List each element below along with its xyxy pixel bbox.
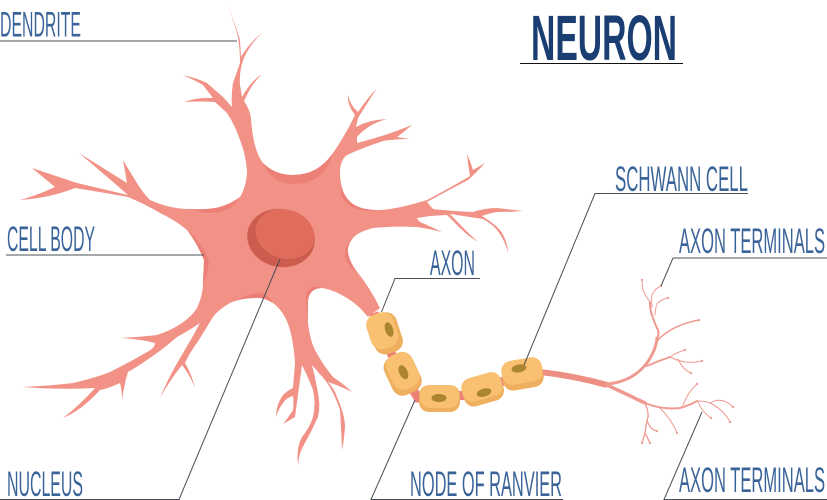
neuron cell body with dendrites	[20, 2, 523, 465]
Schwann cell 5	[500, 356, 545, 392]
icon: nucleus	[242, 201, 321, 273]
label: axon terminals upper	[661, 222, 827, 286]
dendrites and soma silhouette	[20, 2, 523, 465]
label: cell body: CELL BODY	[7, 220, 95, 259]
label: Schwann cell	[524, 160, 748, 365]
label: nucleus	[0, 259, 280, 500]
axon segments and nodes	[374, 313, 525, 398]
Schwann cell 2	[380, 348, 425, 399]
Schwann cells	[363, 308, 545, 412]
axon terminals branching	[540, 279, 734, 444]
Schwann cell 4	[459, 370, 506, 409]
label: axon: AXON	[430, 244, 475, 283]
Schwann cell 3	[419, 385, 460, 412]
label: axon terminals lower	[664, 412, 827, 500]
title: NEURON: NEURON	[531, 2, 677, 74]
label: node of Ranvier	[371, 400, 563, 500]
terminal end dots	[641, 279, 734, 444]
soma shading	[187, 153, 377, 315]
label: axon	[382, 244, 480, 312]
label: dendrite: DENDRITE	[0, 6, 81, 44]
Schwann cell 1	[363, 308, 406, 358]
